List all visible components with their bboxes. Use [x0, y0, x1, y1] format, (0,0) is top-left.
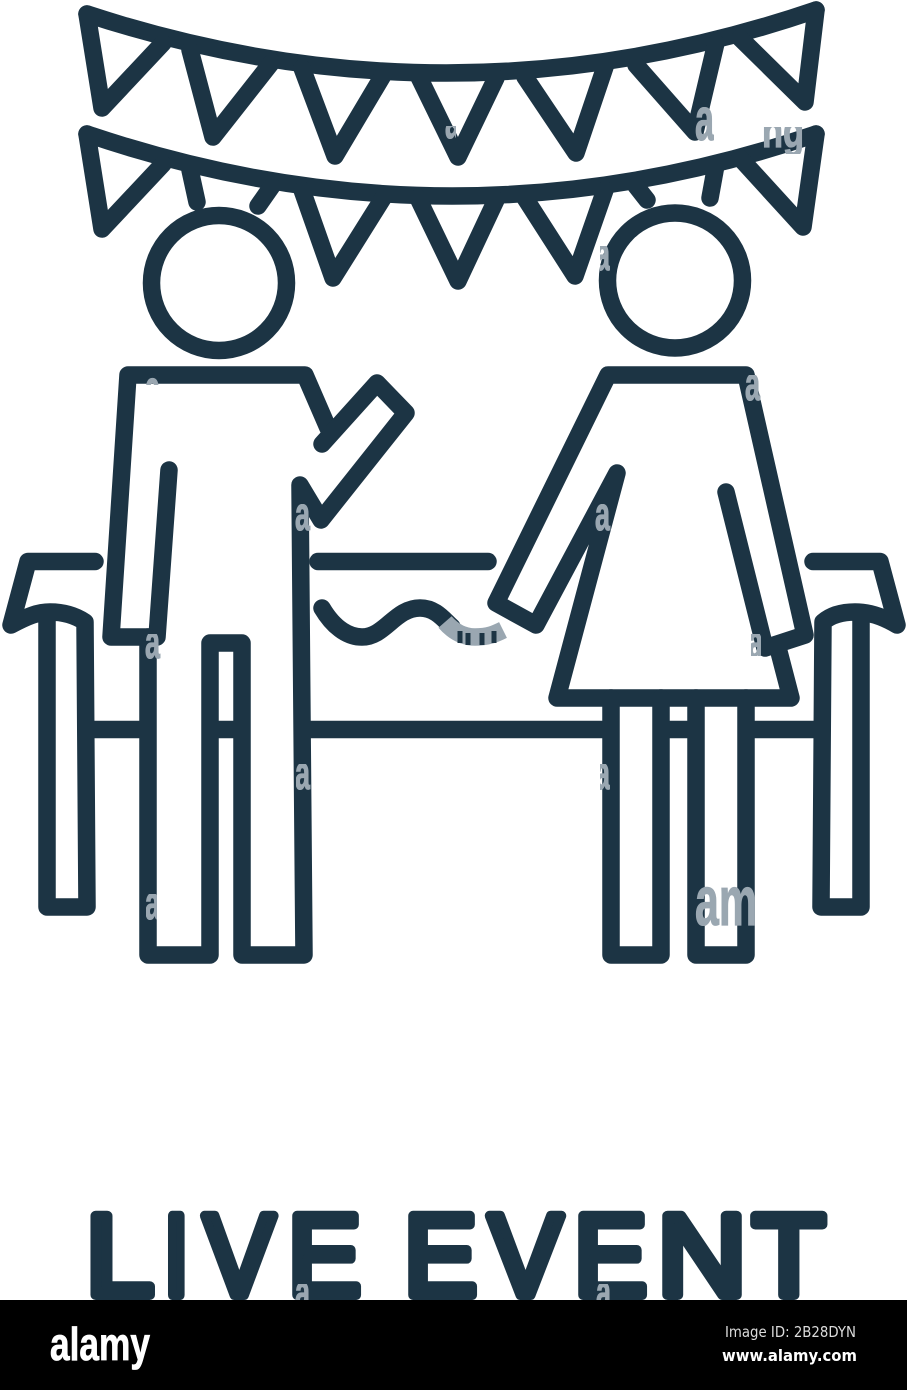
title: T: [753, 1192, 825, 1320]
stock photo watermark letters: a: [295, 1265, 310, 1318]
image id: Image ID: 2B28DYN: [725, 1323, 856, 1341]
title: V: [489, 1192, 562, 1320]
website: www.alamy.com: [722, 1346, 857, 1365]
title: I: [164, 1192, 189, 1320]
title: E: [404, 1192, 477, 1320]
stock photo watermark letters: a: [295, 746, 310, 799]
icon: woman dress and arms: [496, 375, 805, 955]
title: N: [658, 1192, 746, 1320]
stock photo watermark letters: a: [145, 615, 160, 668]
icon: upper bunting garland: [87, 10, 816, 157]
stock photo watermark letters: a: [595, 227, 610, 280]
stock photo watermark letters: a: [295, 487, 310, 540]
title: [86, 1192, 825, 1320]
stock photo watermark letters: a: [748, 615, 763, 668]
stock photo watermark letters: am: [695, 862, 757, 940]
icon: lower bunting garland: [87, 134, 816, 281]
alamy logo: alamy: [50, 1318, 150, 1370]
stock photo watermark letters: [145, 86, 804, 1318]
stock photo watermark letters: a: [745, 357, 760, 410]
stock photo watermark letters: a: [595, 746, 610, 799]
stock photo watermark letters: a: [595, 487, 610, 540]
stock photo watermark letters: a: [695, 86, 714, 153]
title: L: [86, 1192, 154, 1320]
stock photo watermark letters: a: [445, 95, 460, 148]
icon: table cloth wave: [322, 608, 503, 645]
icon: man body with raised arm: [111, 375, 406, 955]
stock photo watermark letters: a: [596, 1265, 611, 1318]
stock photo watermark letters: a: [145, 876, 160, 929]
stock photo watermark letters: a: [145, 361, 160, 414]
title: E: [574, 1192, 647, 1320]
icon: woman head: [608, 213, 742, 348]
icon: table: [11, 562, 897, 907]
title: E: [288, 1192, 361, 1320]
icon: man head: [152, 216, 286, 350]
stock photo watermark letters: ng: [762, 104, 804, 157]
title: V: [204, 1192, 275, 1320]
footer bar: [0, 1300, 907, 1390]
